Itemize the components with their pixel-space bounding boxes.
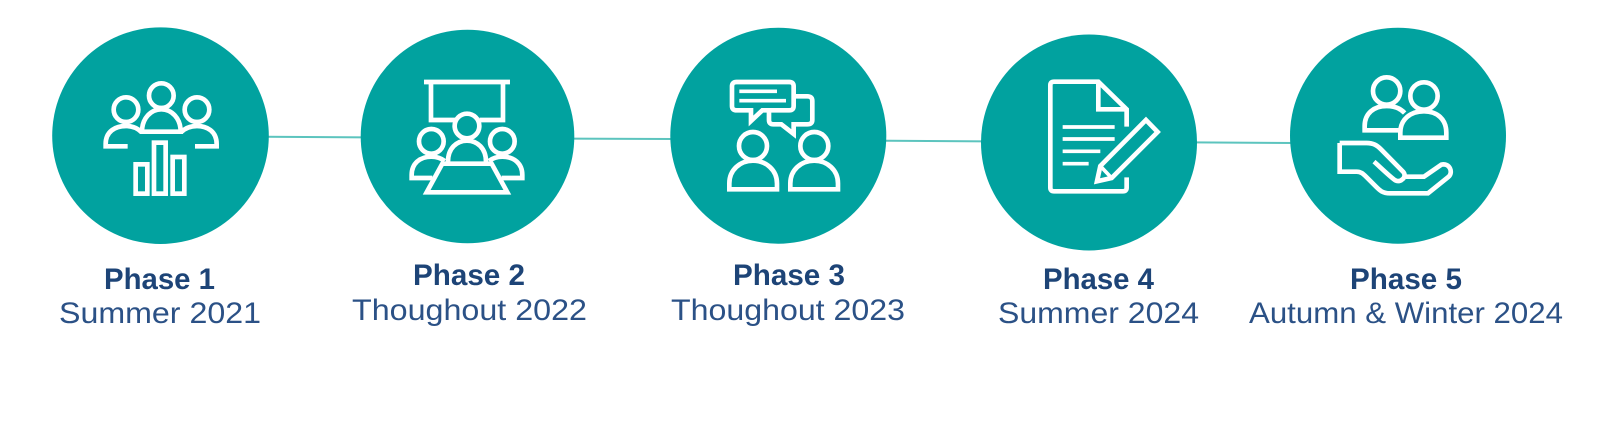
- label: phase 2: Thoughout 2022: [352, 294, 587, 327]
- label: phase 1: [59, 263, 261, 330]
- icon: people with bar chart: [106, 83, 217, 194]
- phase 2 circle: [361, 30, 574, 243]
- icon: hand holding people: [1340, 77, 1451, 193]
- label: phase 3: Phase 3: [733, 259, 845, 292]
- phase 3 circle: [670, 28, 886, 244]
- connector: phase 2 to 3: [570, 138, 674, 140]
- icon: meeting with presentation screen: [412, 82, 522, 192]
- icon: two people in conversation: [729, 82, 838, 189]
- label: phase 2: Phase 2: [413, 259, 525, 292]
- label: phase 4: Phase 4: [1043, 263, 1154, 296]
- label: phase 3: Thoughout 2023: [671, 294, 905, 327]
- label: phase 3: [671, 259, 905, 327]
- label: phase 5: [1249, 263, 1563, 330]
- phase 5 circle: [1290, 28, 1506, 244]
- label: phase 4: Summer 2024: [998, 297, 1199, 330]
- label: phase 5: Autumn & Winter 2024: [1249, 297, 1563, 330]
- label: phase 5: Phase 5: [1350, 263, 1462, 296]
- label: phase 2: [352, 259, 587, 327]
- connector: phase 4 to 5: [1193, 141, 1294, 144]
- connector: phase 3 to 4: [882, 140, 985, 142]
- icon: document with pencil: [1050, 82, 1158, 191]
- label: phase 4: [998, 263, 1199, 330]
- phase 1 circle: [52, 27, 269, 244]
- label: phase 1: Summer 2021: [59, 297, 261, 330]
- connector: phase 1 to 2: [265, 136, 365, 138]
- label: phase 1: Phase 1: [104, 263, 215, 296]
- phase 4 circle: [981, 34, 1197, 250]
